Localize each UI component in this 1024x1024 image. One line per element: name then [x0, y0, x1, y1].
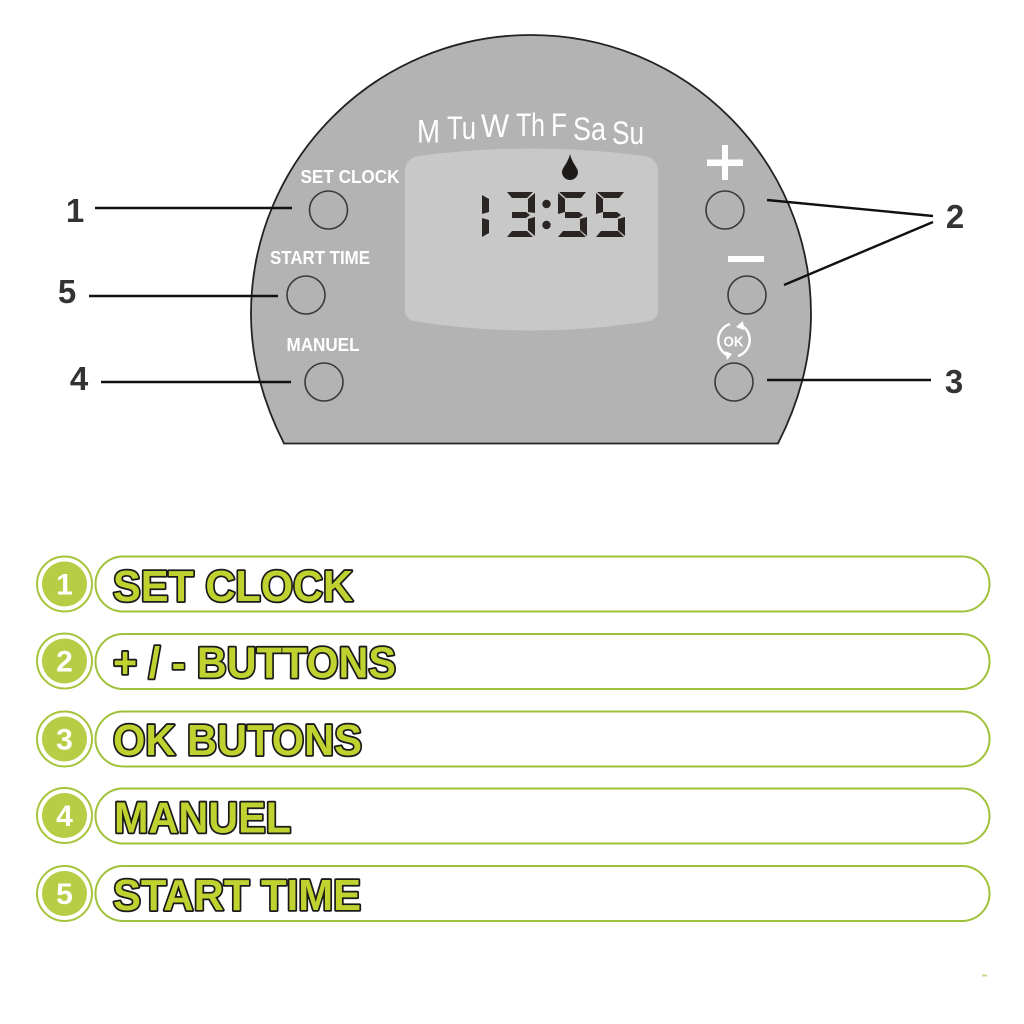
- pill 1: [96, 556, 990, 612]
- badge 3: [37, 712, 92, 766]
- callout numbers: 5: [58, 273, 76, 310]
- legend row 2: [37, 634, 990, 689]
- label 4: MANUEL: [114, 794, 291, 842]
- badge 4: [37, 788, 92, 843]
- pill 4: [96, 788, 990, 844]
- badge 2: [37, 634, 92, 688]
- weekday labels: Su: [612, 115, 644, 151]
- digit 5: [596, 192, 625, 237]
- button labels: START TIME: [270, 248, 370, 268]
- label 3: OK BUTONS: [113, 716, 362, 765]
- callout numbers: 2: [946, 198, 964, 235]
- label 2: + / - BUTTONS: [113, 638, 396, 688]
- weekday labels: M: [417, 114, 440, 150]
- icon: OK cycle: OK: [724, 334, 744, 350]
- pill 5: [96, 866, 990, 921]
- callout numbers: 1: [66, 192, 84, 229]
- callout numbers: [58, 192, 964, 400]
- icon: water drop: [562, 154, 578, 180]
- weekday labels: F: [551, 107, 567, 143]
- weekday labels: Tu: [447, 110, 476, 146]
- digit 1: [482, 195, 489, 237]
- weekday labels: Th: [516, 107, 545, 143]
- legend row 4: [37, 788, 990, 844]
- button labels: [270, 167, 400, 355]
- digit 5: [558, 192, 587, 237]
- badge 3: 3: [56, 724, 73, 756]
- pill 3: [96, 712, 990, 766]
- device body: [251, 35, 811, 444]
- legend row 5: [37, 866, 990, 921]
- button labels: SET CLOCK: [300, 167, 400, 187]
- weekday labels: Sa: [573, 111, 606, 147]
- digit 3: [507, 192, 535, 237]
- badge 1: 1: [56, 568, 73, 602]
- callout numbers: 4: [70, 360, 89, 397]
- LCD screen: [405, 148, 658, 330]
- panel: timer device: [251, 35, 811, 444]
- legend row 3: [37, 712, 990, 766]
- label 5: START TIME: [113, 871, 361, 920]
- label 1: SET CLOCK: [113, 562, 353, 611]
- icon: minus: [728, 256, 764, 262]
- badge 2: 2: [56, 646, 73, 678]
- badge 5: 5: [56, 878, 73, 911]
- callout numbers: 3: [945, 363, 963, 400]
- badge 1: [37, 556, 92, 612]
- button labels: MANUEL: [286, 335, 360, 355]
- icon: OK cycle: [718, 321, 750, 360]
- pill 2: [96, 634, 990, 689]
- LCD time display: [482, 192, 625, 237]
- buttons: [287, 191, 766, 401]
- stray green speck: [982, 974, 987, 976]
- weekday labels: [417, 107, 644, 151]
- legend row 1: [37, 556, 990, 612]
- icon: plus: [707, 145, 743, 180]
- colon: [542, 200, 551, 229]
- badge 5: [37, 866, 92, 921]
- weekday labels: W: [481, 108, 510, 144]
- badge 4: 4: [56, 800, 73, 833]
- leader lines: [89, 200, 933, 382]
